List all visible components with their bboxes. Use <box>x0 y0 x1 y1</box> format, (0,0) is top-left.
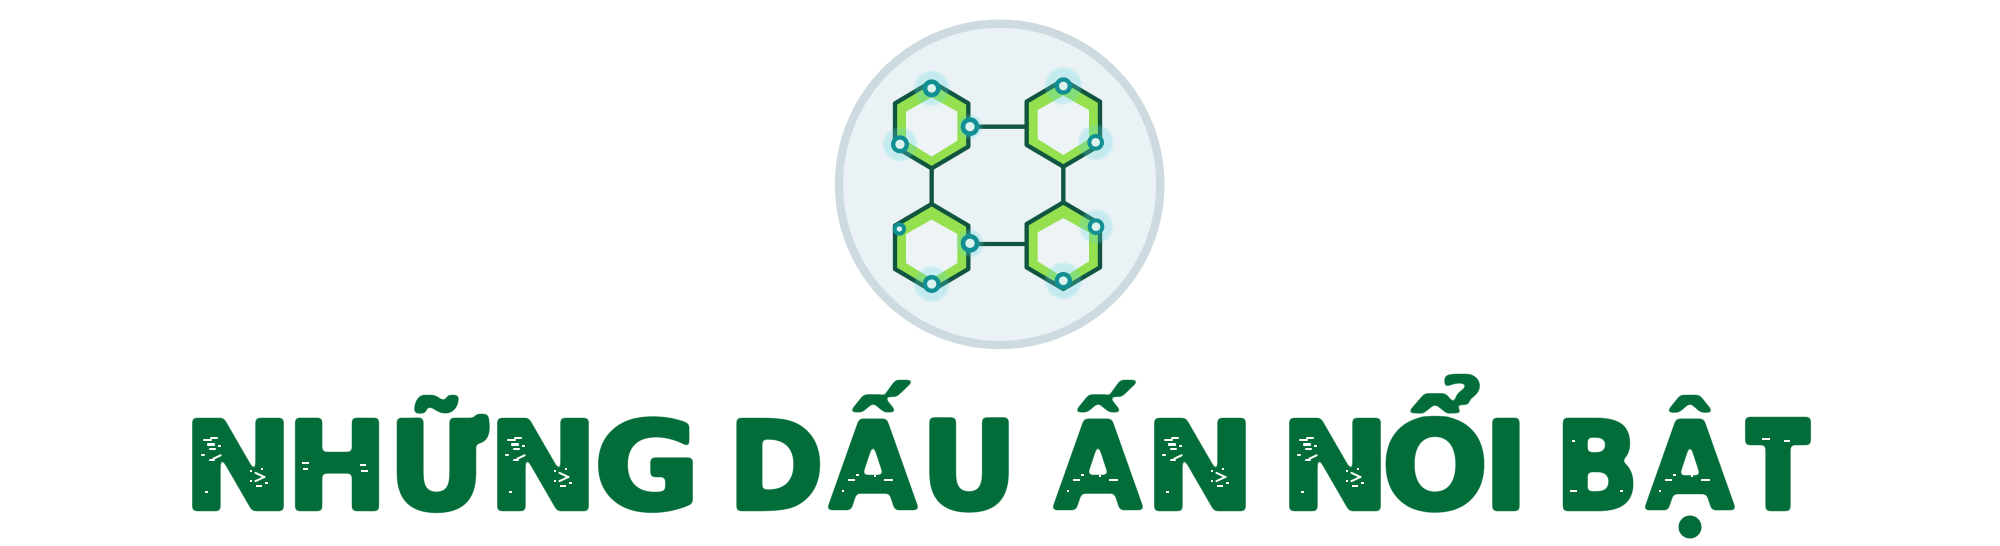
hexagon: bottom right <box>1027 202 1100 289</box>
title: G <box>594 396 700 538</box>
title: Ấ <box>828 396 918 538</box>
title: N <box>487 396 599 538</box>
title: Ấ <box>1053 396 1143 538</box>
title: D <box>728 396 824 538</box>
hexagon: top right <box>1027 80 1100 167</box>
title: H <box>286 396 388 538</box>
title: B <box>1555 396 1639 538</box>
title: N <box>182 396 294 538</box>
icon background circle <box>839 24 1160 345</box>
title: Ậ <box>1645 396 1735 538</box>
title: T <box>1749 402 1807 532</box>
connector bonds <box>932 127 1063 244</box>
title: N <box>1279 396 1391 538</box>
title <box>182 374 1812 538</box>
title: N <box>1144 396 1256 538</box>
title: I <box>1483 396 1529 538</box>
hexagon: bottom left <box>895 204 968 291</box>
title: Ổ <box>1382 396 1488 538</box>
hexagon: top left <box>895 82 968 168</box>
title: U <box>920 396 1018 538</box>
title: Ữ <box>388 396 488 538</box>
glowing nodes <box>883 68 1113 301</box>
